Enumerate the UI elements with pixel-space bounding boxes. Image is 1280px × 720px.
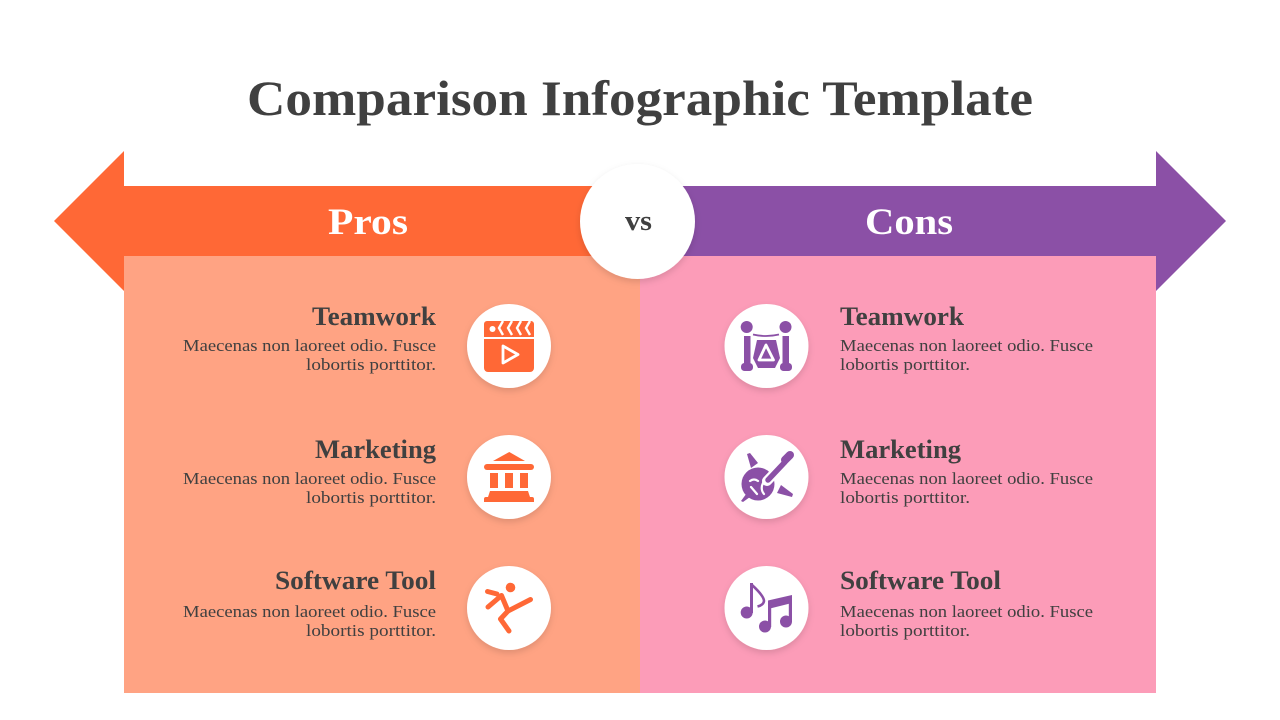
pros item: teamwork bbox=[183, 302, 551, 388]
cons teamwork text: Maecenas non laoreet odio. Fusce bbox=[840, 336, 1093, 355]
cons marketing heading: Marketing bbox=[840, 435, 961, 464]
pros marketing text: Maecenas non laoreet odio. Fusce bbox=[183, 469, 436, 488]
icon: gong bbox=[724, 304, 808, 388]
vs badge: vs bbox=[625, 206, 652, 237]
pros teamwork text bbox=[183, 336, 436, 374]
pros marketing heading: Marketing bbox=[315, 435, 436, 464]
panel: cons background bbox=[640, 256, 1156, 693]
title: Comparison Infographic Template bbox=[247, 70, 1033, 126]
cons teamwork text bbox=[840, 336, 1093, 374]
panel: pros background bbox=[124, 256, 640, 693]
icon: palette and brush bbox=[724, 435, 808, 519]
cons software tool text: Maecenas non laoreet odio. Fusce bbox=[840, 602, 1093, 621]
pros software tool heading: Software Tool bbox=[275, 566, 436, 595]
vs badge bbox=[580, 164, 695, 279]
arrow: pros header bbox=[54, 151, 640, 291]
cons teamwork heading: Teamwork bbox=[840, 302, 965, 331]
pros item: marketing bbox=[183, 435, 551, 519]
icon: bank building bbox=[467, 435, 551, 519]
cons marketing text bbox=[840, 469, 1093, 507]
pros item: software tool bbox=[183, 566, 551, 650]
pros software tool text bbox=[183, 602, 436, 640]
pros marketing text bbox=[183, 469, 436, 507]
pros teamwork heading: Teamwork bbox=[312, 302, 437, 331]
arrow: cons header bbox=[640, 151, 1226, 291]
pros teamwork text: lobortis porttitor. bbox=[306, 355, 436, 374]
cons software tool text: lobortis porttitor. bbox=[840, 621, 970, 640]
cons item: marketing bbox=[724, 435, 1093, 519]
icon: clapperboard bbox=[467, 304, 551, 388]
icon: kicking figure bbox=[467, 566, 551, 650]
cons teamwork text: lobortis porttitor. bbox=[840, 355, 970, 374]
heading: cons: Cons bbox=[865, 202, 953, 243]
heading: pros: Pros bbox=[328, 202, 408, 243]
pros teamwork text: Maecenas non laoreet odio. Fusce bbox=[183, 336, 436, 355]
cons item: teamwork bbox=[724, 302, 1093, 388]
pros marketing text: lobortis porttitor. bbox=[306, 488, 436, 507]
pros software tool text: Maecenas non laoreet odio. Fusce bbox=[183, 602, 436, 621]
cons marketing text: lobortis porttitor. bbox=[840, 488, 970, 507]
cons software tool text bbox=[840, 602, 1093, 640]
pros software tool text: lobortis porttitor. bbox=[306, 621, 436, 640]
cons item: software tool bbox=[724, 566, 1093, 650]
cons software tool heading: Software Tool bbox=[840, 566, 1001, 595]
icon: music notes bbox=[724, 566, 808, 650]
cons marketing text: Maecenas non laoreet odio. Fusce bbox=[840, 469, 1093, 488]
